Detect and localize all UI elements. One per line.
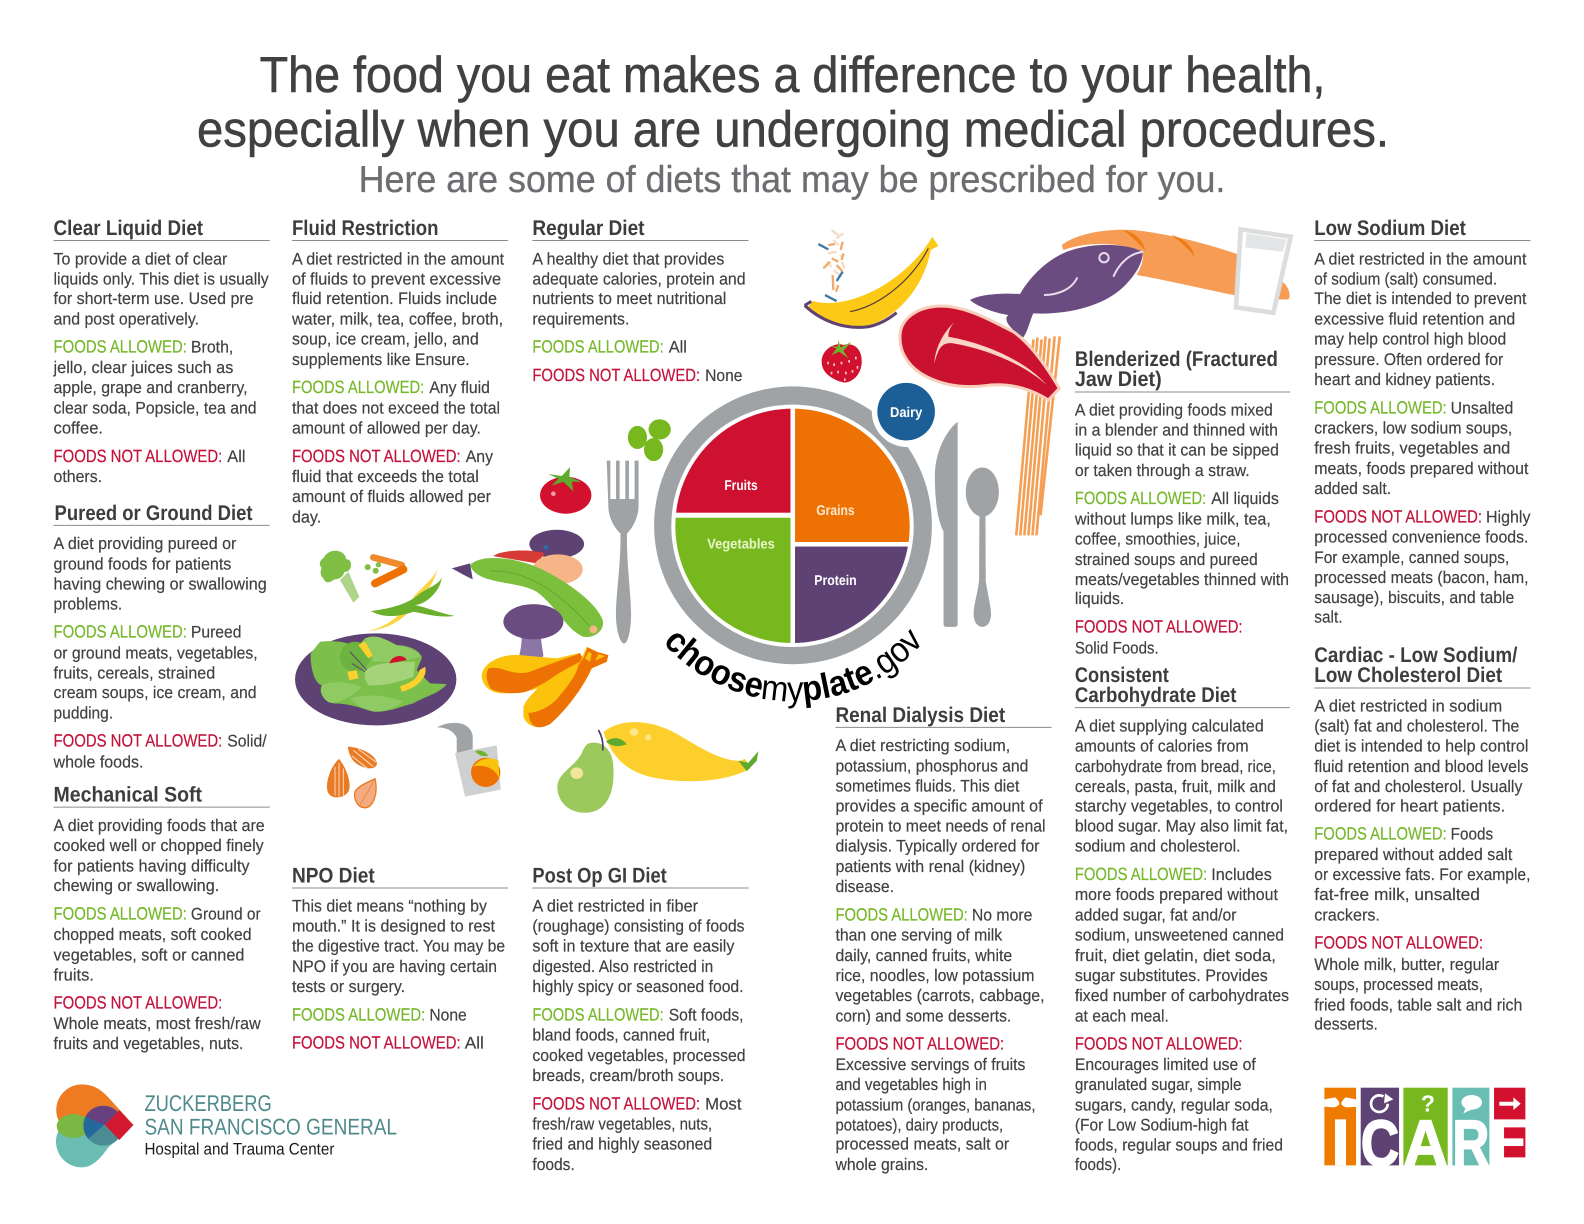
panel: Renal Dialysis Diet: potatoes), dairy products, (835, 1115, 1003, 1135)
label: Grains: Grains (816, 502, 855, 518)
panel: Renal Dialysis Diet: and vegetables high in (835, 1075, 987, 1094)
panel: Mechanical Soft: cooked well or chopped finely (54, 836, 264, 855)
panel: Fluid Restriction: fluid that exceeds the total (292, 467, 479, 486)
icon: banana (805, 237, 938, 327)
panel: Fluid Restriction: Fluid Restriction (292, 217, 438, 240)
panel: Blenderized (Fractured Jaw Diet): meats/vegetables thinned with (1075, 570, 1289, 589)
panel: Consistent Carbohydrate Diet: FOODS ALLOWED: (1075, 864, 1207, 884)
panel: Low Sodium Diet: may help control high blood (1314, 329, 1506, 349)
panel: Cardiac - Low Sodium/Low Cholesterol Diet: Cardiac - Low Sodium/ (1314, 644, 1517, 667)
label: Fruits: Fruits (724, 477, 758, 493)
letter A: A (1403, 1107, 1448, 1179)
illustration: choosemyplate plate (606, 382, 999, 708)
panel: Pureed or Ground Diet: Pureed (191, 622, 241, 642)
icon: broccoli (320, 551, 359, 603)
panel: Renal Dialysis Diet: FOODS ALLOWED: (835, 904, 968, 924)
panel: Renal Dialysis Diet: provides a specific amount of (835, 796, 1043, 815)
panel: Fluid Restriction: supplements like Ensure. (292, 350, 470, 369)
panel: Mechanical Soft (54, 784, 270, 1053)
panel: Consistent Carbohydrate Diet: Includes (1211, 865, 1272, 884)
panel: Consistent Carbohydrate Diet: at each meal. (1075, 1006, 1169, 1025)
section: protein (795, 546, 908, 643)
panel: Low Sodium Diet: Low Sodium Diet (1314, 217, 1466, 240)
section: vegetables (675, 518, 790, 643)
panel: Blenderized (Fractured Jaw Diet) (1074, 348, 1290, 658)
panel: Blenderized (Fractured Jaw Diet): liquid so that it can be sipped (1075, 441, 1279, 460)
panel: Renal Dialysis Diet: sometimes fluids. This diet (835, 776, 1020, 796)
section: fruits (676, 408, 790, 513)
panel: Mechanical Soft: fruits and vegetables, nuts. (54, 1034, 243, 1053)
icon: mushroom (503, 604, 563, 660)
panel: Renal Dialysis Diet: than one serving of milk (835, 925, 1003, 945)
panel: Mechanical Soft: A diet providing foods that are (54, 816, 265, 835)
panel: Low Sodium Diet: meats, foods prepared without (1314, 459, 1529, 478)
panel: Low Sodium Diet: The diet is intended to prevent (1314, 289, 1527, 308)
panel: Clear Liquid Diet: All (227, 447, 245, 466)
panel: NPO Diet: FOODS ALLOWED: (292, 1004, 425, 1024)
panel: Regular Diet: requirements. (532, 309, 629, 328)
panel: Fluid Restriction: that does not exceed the total (292, 398, 500, 417)
panel: Pureed or Ground Diet: FOODS ALLOWED: (54, 621, 187, 642)
panel: Regular Diet: adequate calories, protein and (532, 269, 746, 289)
icon: chicken drumsticks (482, 647, 608, 727)
panel: Consistent Carbohydrate Diet: starchy vegetables, to control (1075, 796, 1283, 815)
panel: Consistent Carbohydrate Diet: Encourages limited use of (1075, 1055, 1256, 1074)
panel: Pureed or Ground Diet: cream soups, ice cream, and (54, 683, 257, 702)
panel: Renal Dialysis Diet: potassium, phosphorus and (835, 756, 1028, 775)
panel: Mechanical Soft: for patients having difficulty (54, 856, 250, 875)
panel: Regular Diet: nutrients to meet nutritional (532, 289, 726, 308)
panel: Low Sodium Diet: Unsalted (1451, 398, 1513, 417)
panel: Low Sodium Diet: Highly (1486, 507, 1531, 526)
panel: Blenderized (Fractured Jaw Diet): Blenderized (Fractured (1075, 348, 1278, 371)
icon: spoon (966, 467, 999, 627)
panel: Clear Liquid Diet: clear soda, Popsicle, tea and (54, 398, 257, 417)
panel: Regular Diet: All (669, 338, 687, 357)
panel: Fluid Restriction: of fluids to prevent excessive (292, 269, 501, 289)
panel: Renal Dialysis Diet: Excessive servings of fruits (835, 1055, 1025, 1074)
panel: Renal Dialysis Diet: protein to meet needs of renal (835, 816, 1046, 836)
subtitle: Here are some of diets that may be prescribed for you. (359, 159, 1225, 200)
panel: Regular Diet (532, 217, 749, 385)
panel: Blenderized (Fractured Jaw Diet): without lumps like milk, tea, (1074, 509, 1271, 528)
panel: Low Sodium Diet: FOODS ALLOWED: (1314, 397, 1447, 417)
panel: Post Op GI Diet (532, 864, 749, 1174)
logo: iCARE (1324, 1088, 1525, 1179)
panel: Cardiac - Low Sodium/Low Cholesterol Diet: fried foods, table salt and rich (1314, 995, 1522, 1014)
panel: Pureed or Ground Diet: Pureed or Ground Diet (55, 502, 253, 525)
panel: Post Op GI Diet: FOODS NOT ALLOWED: (532, 1093, 700, 1113)
panel: Renal Dialysis Diet: whole grains. (834, 1155, 928, 1174)
plate sections (667, 404, 916, 649)
panel: Post Op GI Diet: fried and highly seasoned (532, 1135, 712, 1154)
panel: Post Op GI Diet: Soft foods, (669, 1005, 744, 1024)
panel: Post Op GI Diet: digested. Also restricted in (532, 957, 713, 976)
panel: Fluid Restriction: amount of allowed per day. (292, 418, 481, 438)
letter R (1452, 1088, 1489, 1179)
panel: Renal Dialysis Diet: A diet restricting sodium, (835, 736, 1010, 755)
panel: NPO Diet: FOODS NOT ALLOWED: (292, 1033, 461, 1053)
panel: Renal Dialysis Diet: potassium (oranges, bananas, (835, 1095, 1035, 1114)
panel: Cardiac - Low Sodium/Low Cholesterol Diet: ordered for heart patients. (1314, 796, 1505, 815)
icon: knife (935, 422, 958, 627)
panel: Clear Liquid Diet: for short-term use. Used pre (54, 289, 254, 308)
panel: Regular Diet: None (705, 366, 742, 385)
panel: Regular Diet: A healthy diet that provides (532, 249, 724, 268)
panel: Clear Liquid Diet: coffee. (54, 418, 103, 438)
icon: potatoes (493, 530, 584, 584)
panel: Fluid Restriction: day. (292, 507, 321, 526)
panel: Low Sodium Diet: heart and kidney patients. (1314, 370, 1495, 389)
panel: Pureed or Ground Diet: fruits, cereals, strained (54, 663, 215, 683)
panel: Post Op GI Diet: bland foods, canned fruit, (532, 1025, 710, 1045)
panel: Consistent Carbohydrate Diet: fixed number of carbohydrates (1075, 986, 1289, 1005)
panel: Renal Dialysis Diet: FOODS NOT ALLOWED: (835, 1034, 1004, 1054)
icon: spaghetti (1016, 336, 1060, 535)
panel: Low Sodium Diet: added salt. (1314, 479, 1391, 498)
panel: NPO Diet (292, 864, 508, 1053)
panel: Consistent Carbohydrate Diet: cereals, pasta, fruit, milk and (1075, 777, 1276, 796)
panel: Cardiac - Low Sodium/Low Cholesterol Diet (1314, 644, 1530, 1034)
panel: Consistent Carbohydrate Diet: carbohydrate from bread, rice, (1075, 757, 1276, 776)
panel: Blenderized (Fractured Jaw Diet): strained soups and pureed (1075, 550, 1258, 569)
panel: Cardiac - Low Sodium/Low Cholesterol Diet: of fat and cholesterol. Usually (1314, 777, 1523, 796)
icon: almonds (327, 747, 377, 808)
panel: Mechanical Soft: Mechanical Soft (54, 784, 202, 807)
panel: Fluid Restriction: FOODS ALLOWED: (292, 377, 424, 397)
panel: Mechanical Soft: vegetables, soft or canned (54, 945, 244, 964)
panel: Low Sodium Diet (1314, 217, 1531, 626)
icon: cereal (818, 230, 845, 301)
panel: Renal Dialysis Diet: No more (972, 905, 1032, 924)
panel: Blenderized (Fractured Jaw Diet): FOODS NOT ALLOWED: (1075, 616, 1243, 637)
logo text: Hospital and Trauma Center (144, 1141, 335, 1159)
label: Vegetables: Vegetables (707, 535, 775, 552)
panel: Clear Liquid Diet: others. (54, 467, 102, 486)
panel: Clear Liquid Diet: To provide a diet of clear (54, 249, 228, 268)
panel: Post Op GI Diet: (roughage) consisting of foods (532, 916, 745, 936)
panel: Consistent Carbohydrate Diet: sugars, candy, regular soda, (1075, 1095, 1273, 1114)
panel: Pureed or Ground Diet: pudding. (54, 703, 113, 722)
panel: Mechanical Soft: chewing or swallowing. (54, 876, 219, 895)
panel: Mechanical Soft: fruits. (54, 965, 94, 985)
panel: Consistent Carbohydrate Diet: sugar substitutes. Provides (1075, 966, 1268, 985)
panel: NPO Diet: the digestive tract. You may be (292, 937, 505, 956)
letter R: R (1452, 1107, 1489, 1179)
panel: Cardiac - Low Sodium/Low Cholesterol Diet: diet is intended to help control (1314, 737, 1528, 756)
panel: Pureed or Ground Diet (53, 502, 270, 771)
panel: Blenderized (Fractured Jaw Diet): FOODS ALLOWED: (1075, 488, 1206, 508)
panel: Renal Dialysis Diet: disease. (835, 877, 894, 896)
panel: Post Op GI Diet: cooked vegetables, processed (532, 1046, 746, 1065)
panel: Low Sodium Diet: of sodium (salt) consumed. (1314, 269, 1497, 289)
panel: Consistent Carbohydrate Diet: added sugar, fat and/or (1075, 905, 1237, 924)
panel: Clear Liquid Diet (53, 217, 270, 486)
panel: Renal Dialysis Diet: dialysis. Typically ordered for (835, 837, 1040, 856)
letter I (1324, 1088, 1356, 1165)
panel: Mechanical Soft: FOODS ALLOWED: (54, 903, 187, 923)
panel: Cardiac - Low Sodium/Low Cholesterol Diet: soups, processed meats, (1314, 975, 1483, 994)
panel: Cardiac - Low Sodium/Low Cholesterol Diet: fat-free milk, unsalted (1314, 885, 1480, 904)
panel: Low Sodium Diet: FOODS NOT ALLOWED: (1314, 506, 1482, 526)
panel: Fluid Restriction: water, milk, tea, coffee, broth, (291, 309, 503, 328)
panel: Clear Liquid Diet: FOODS ALLOWED: (54, 337, 187, 357)
panel: Fluid Restriction (291, 217, 508, 526)
panel: Post Op GI Diet: breads, cream/broth soups. (532, 1066, 724, 1085)
panel: Cardiac - Low Sodium/Low Cholesterol Diet: FOODS NOT ALLOWED: (1314, 933, 1483, 953)
panel: Mechanical Soft: FOODS NOT ALLOWED: (54, 992, 222, 1012)
panel: Fluid Restriction: amount of fluids allowed per (292, 487, 491, 506)
panel: NPO Diet: None (429, 1005, 467, 1024)
panel: Blenderized (Fractured Jaw Diet): in a blender and thinned with (1075, 420, 1278, 440)
panel: Blenderized (Fractured Jaw Diet): All liquids (1211, 489, 1279, 508)
panel: Pureed or Ground Diet: or ground meats, vegetables, (54, 643, 258, 662)
panel: Clear Liquid Diet: Clear Liquid Diet (54, 217, 203, 240)
panel: Blenderized (Fractured Jaw Diet): A diet providing foods mixed (1075, 400, 1273, 419)
panel: Low Sodium Diet: processed convenience foods. (1314, 527, 1528, 547)
panel: Post Op GI Diet: Post Op GI Diet (532, 864, 667, 888)
panel: Renal Dialysis Diet: Renal Dialysis Diet (835, 704, 1005, 727)
panel: Low Sodium Diet: fresh fruits, vegetables and (1314, 439, 1510, 458)
panel: Pureed or Ground Diet: A diet providing pureed or (54, 534, 237, 553)
panel: Consistent Carbohydrate Diet: Carbohydrate Diet (1075, 684, 1236, 707)
icon: green beans (366, 567, 455, 631)
panel: Renal Dialysis Diet: patients with renal (kidney) (835, 857, 1025, 876)
panel: Pureed or Ground Diet: whole foods. (53, 752, 143, 771)
panel: Consistent Carbohydrate Diet: Consistent (1075, 664, 1169, 687)
panel: Regular Diet: Regular Diet (532, 217, 645, 240)
panel: Cardiac - Low Sodium/Low Cholesterol Diet: desserts. (1314, 1014, 1378, 1034)
logo text: ZUCKERBERG (144, 1091, 272, 1116)
panel: Consistent Carbohydrate Diet: (For Low Sodium-high fat (1075, 1115, 1249, 1135)
panel: Low Sodium Diet: salt. (1314, 607, 1343, 626)
panel: Renal Dialysis Diet: corn) and some desserts. (835, 1006, 1011, 1025)
panel: Consistent Carbohydrate Diet: amounts of calories from (1075, 737, 1249, 756)
panel: Mechanical Soft: Ground or (191, 904, 261, 923)
panel: Post Op GI Diet: A diet restricted in fiber (532, 896, 699, 915)
icon: fish (970, 245, 1143, 337)
panel: NPO Diet: All (465, 1034, 484, 1053)
panel: Fluid Restriction: fluid retention. Fluids include (292, 289, 497, 308)
panel: Fluid Restriction: soup, ice cream, jello, and (292, 329, 479, 349)
panel: Low Sodium Diet: processed meats (bacon, ham, (1314, 568, 1528, 587)
panel: Blenderized (Fractured Jaw Diet): coffee, smoothies, juice, (1075, 529, 1241, 549)
logo text: SAN FRANCISCO GENERAL (144, 1114, 397, 1140)
panel: Consistent Carbohydrate Diet: sodium and cholesterol. (1075, 837, 1241, 856)
title: The food you eat makes a difference to your health, (260, 46, 1325, 103)
panel: Low Sodium Diet: pressure. Often ordered for (1314, 350, 1504, 369)
panel: Renal Dialysis Diet (834, 704, 1052, 1174)
logo: Zuckerberg San Francisco General (56, 1084, 397, 1167)
panel: Clear Liquid Diet: and post operatively. (54, 309, 199, 328)
panel: Clear Liquid Diet: FOODS NOT ALLOWED: (54, 446, 222, 466)
panel: Consistent Carbohydrate Diet: foods, regular soups and fried (1075, 1136, 1283, 1155)
panel: Cardiac - Low Sodium/Low Cholesterol Diet: prepared without added salt (1314, 845, 1513, 864)
panel: Pureed or Ground Diet: problems. (54, 594, 122, 613)
panel: Renal Dialysis Diet: processed meats, salt or (835, 1135, 1010, 1154)
choosemyplate.gov curved text: choosemyplate.gov (666, 629, 920, 708)
panel: Blenderized (Fractured Jaw Diet): or taken through a straw. (1075, 461, 1250, 480)
foods: vegetable group (295, 530, 608, 727)
panel: Clear Liquid Diet: apple, grape and cranberry, (54, 378, 247, 397)
panel: Consistent Carbohydrate Diet: blood sugar. May also limit fat, (1075, 816, 1288, 836)
plate rim (654, 386, 932, 664)
panel: Cardiac - Low Sodium/Low Cholesterol Diet: Whole milk, butter, regular (1314, 955, 1500, 974)
panel: Blenderized (Fractured Jaw Diet): Solid Foods. (1075, 639, 1159, 658)
panel: Low Sodium Diet: excessive fluid retention and (1314, 309, 1515, 328)
panel: Renal Dialysis Diet: rice, noodles, low potassium (835, 966, 1034, 985)
icon: tomato (540, 467, 591, 514)
label: Protein: Protein (814, 572, 857, 588)
panel: Cardiac - Low Sodium/Low Cholesterol Diet: Foods (1451, 824, 1493, 844)
panel: Renal Dialysis Diet: daily, canned fruits, white (835, 946, 1012, 965)
panel: NPO Diet: NPO if you are having certain (292, 957, 497, 976)
icon: yellow squash (603, 722, 758, 781)
panel: Post Op GI Diet: highly spicy or seasoned food. (532, 977, 744, 996)
dairy circle: Dairy (890, 404, 923, 420)
panel: Mechanical Soft: chopped meats, soft cooked (54, 925, 252, 944)
panel: Regular Diet: FOODS NOT ALLOWED: (532, 365, 700, 385)
panel: Post Op GI Diet: foods. (532, 1155, 575, 1174)
title (197, 46, 1389, 158)
illustration: left foods (295, 419, 758, 813)
letter E (1494, 1088, 1525, 1157)
icon: salad plate (295, 633, 456, 725)
panel: Cardiac - Low Sodium/Low Cholesterol Diet: (salt) fat and cholesterol. The (1314, 716, 1519, 736)
icon: fork (607, 461, 639, 644)
panel: NPO Diet: This diet means “nothing by (292, 896, 488, 915)
panel: Post Op GI Diet: Most (705, 1094, 742, 1113)
panel: NPO Diet: mouth.” It is designed to rest (292, 916, 495, 936)
icon: juice box (437, 723, 501, 797)
panel: Clear Liquid Diet: liquids only. This diet is usually (54, 269, 269, 289)
icon: glass of milk (1236, 229, 1291, 313)
letter C (1361, 1088, 1399, 1179)
section: grains (795, 404, 916, 542)
logo text (144, 1091, 397, 1159)
panel: Fluid Restriction: A diet restricted in the amount (292, 249, 504, 268)
panel: Clear Liquid Diet: Broth, (191, 338, 233, 357)
icon: bread loaf (1062, 230, 1290, 299)
title: especially when you are undergoing medical procedures. (197, 101, 1389, 158)
panel: Clear Liquid Diet: jello, clear juices such as (53, 358, 233, 377)
panel: Low Sodium Diet: sausage), biscuits, and table (1314, 588, 1514, 607)
icon: zucchini (452, 558, 603, 637)
panel: Consistent Carbohydrate Diet: FOODS NOT ALLOWED: (1075, 1034, 1243, 1054)
panel: Post Op GI Diet: FOODS ALLOWED: (532, 1004, 664, 1024)
panel: Blenderized (Fractured Jaw Diet): Jaw Diet) (1075, 368, 1162, 391)
panel: Cardiac - Low Sodium/Low Cholesterol Diet: crackers. (1314, 905, 1380, 924)
panel: Cardiac - Low Sodium/Low Cholesterol Diet: A diet restricted in sodium (1314, 696, 1502, 715)
dairy circle (872, 376, 943, 447)
icon: green grapes (628, 419, 671, 461)
panel: Consistent Carbohydrate Diet: more foods prepared without (1075, 885, 1278, 904)
panel: Cardiac - Low Sodium/Low Cholesterol Diet: fluid retention and blood levels (1314, 757, 1528, 776)
panel: Consistent Carbohydrate Diet: granulated sugar, simple (1075, 1075, 1242, 1094)
panel: Consistent Carbohydrate Diet (1075, 664, 1290, 1174)
panel: Mechanical Soft: Whole meats, most fresh/raw (54, 1014, 262, 1033)
icon: carrots and peas (365, 557, 403, 583)
panel: Low Sodium Diet: crackers, low sodium soups, (1314, 418, 1512, 438)
panel: Regular Diet: FOODS ALLOWED: (532, 337, 664, 357)
panel: Pureed or Ground Diet: Solid/ (227, 732, 267, 751)
panel: Consistent Carbohydrate Diet: sodium, unsweetened canned (1075, 925, 1284, 945)
icon: steak (900, 306, 1059, 400)
foods: bottom group (327, 722, 758, 813)
letter C: C (1361, 1107, 1399, 1179)
panel: Fluid Restriction: Any (466, 447, 494, 466)
panel: Cardiac - Low Sodium/Low Cholesterol Diet: FOODS ALLOWED: (1314, 823, 1447, 844)
panel: Pureed or Ground Diet: FOODS NOT ALLOWED: (54, 730, 222, 751)
letter A: ? (1421, 1091, 1435, 1117)
icon: strawberry (822, 340, 862, 382)
panel: Cardiac - Low Sodium/Low Cholesterol Diet: Low Cholesterol Diet (1314, 664, 1502, 687)
panel: Renal Dialysis Diet: vegetables (carrots, cabbage, (835, 986, 1045, 1005)
panel: Consistent Carbohydrate Diet: foods). (1075, 1155, 1121, 1174)
panel: Cardiac - Low Sodium/Low Cholesterol Diet: or excessive fats. For example, (1314, 865, 1530, 884)
panel: Consistent Carbohydrate Diet: A diet supplying calculated (1075, 716, 1264, 736)
panel: Pureed or Ground Diet: having chewing or swallowing (54, 574, 267, 594)
panel: NPO Diet: NPO Diet (292, 864, 375, 888)
panel: NPO Diet: tests or surgery. (292, 977, 405, 996)
panel: Post Op GI Diet: soft in texture that are easily (532, 937, 735, 956)
panel: Fluid Restriction: Any fluid (429, 378, 490, 397)
panel: Pureed or Ground Diet: ground foods for patients (54, 554, 231, 573)
logo mark (56, 1084, 133, 1167)
panel: Blenderized (Fractured Jaw Diet): liquids. (1075, 589, 1124, 608)
panel: Post Op GI Diet: fresh/raw vegetables, nuts, (532, 1114, 712, 1134)
panel: Fluid Restriction: FOODS NOT ALLOWED: (292, 446, 461, 466)
panel: Consistent Carbohydrate Diet: fruit, diet gelatin, diet soda, (1075, 946, 1276, 965)
panel: Low Sodium Diet: For example, canned soups, (1314, 548, 1509, 567)
panel: Low Sodium Diet: A diet restricted in the amount (1314, 249, 1527, 268)
illustration: top foods (805, 229, 1291, 535)
icon: pear (557, 730, 627, 813)
